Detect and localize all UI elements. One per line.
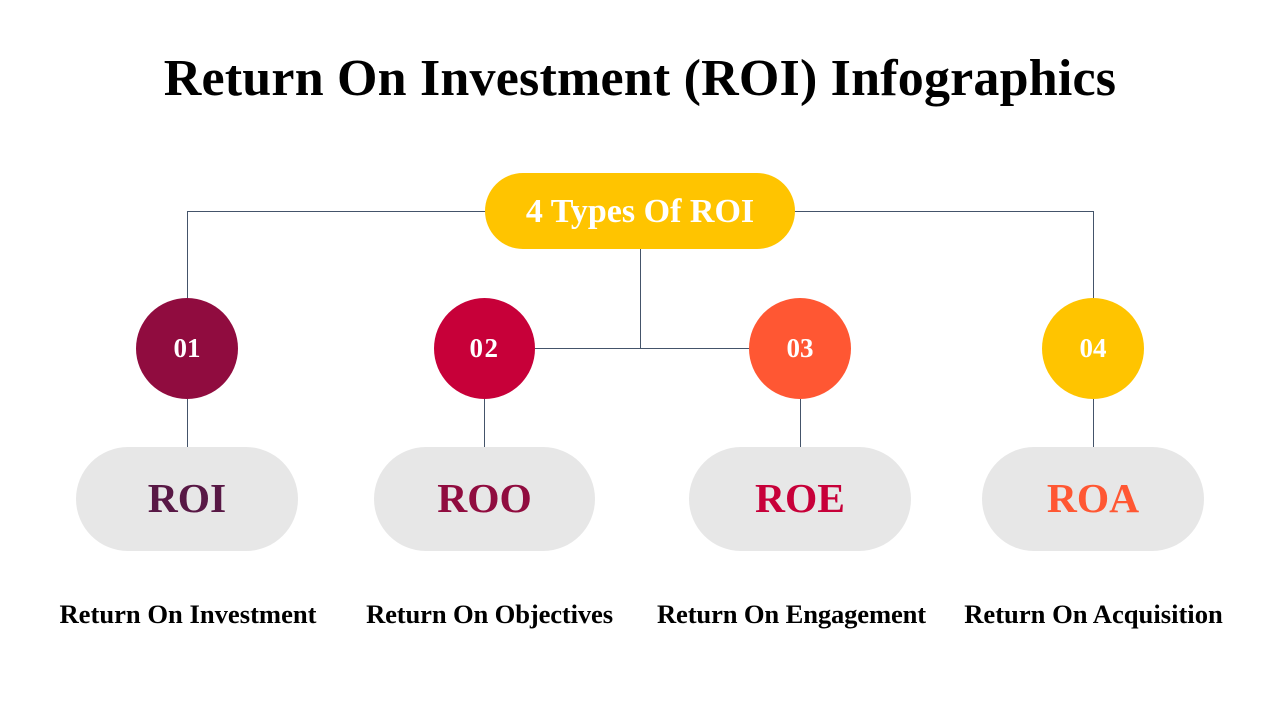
- central pill: 4 Types Of ROI: [485, 173, 795, 249]
- circle 03: [749, 298, 851, 399]
- pill: ROO: ROO: [437, 475, 532, 521]
- pill: ROO: [374, 447, 595, 551]
- pill: ROE: [689, 447, 911, 551]
- label: Return On Engagement: Return On Engagement: [657, 599, 926, 629]
- central pill: 4 Types Of ROI: 4 Types Of ROI: [526, 193, 754, 230]
- circle 02: 02: [470, 333, 500, 363]
- title: Return On Investment (ROI) Infographics: [164, 50, 1116, 107]
- label: Return On Investment: Return On Investment: [59, 599, 317, 629]
- circle 01: [136, 298, 238, 399]
- pill: ROE: ROE: [755, 475, 845, 521]
- label: Return On Objectives: Return On Objectives: [366, 599, 613, 629]
- label: Return On Acquisition: Return On Acquisition: [964, 599, 1223, 629]
- pill: ROA: [982, 447, 1204, 551]
- circle 03: 03: [786, 333, 814, 363]
- circle 04: [1042, 298, 1144, 399]
- circle 04: 04: [1080, 333, 1106, 363]
- pill: ROI: [76, 447, 298, 551]
- circle 02: [434, 298, 535, 399]
- circle 01: 01: [174, 333, 200, 363]
- pill: ROA: ROA: [1047, 475, 1139, 521]
- pill: ROI: ROI: [148, 475, 226, 521]
